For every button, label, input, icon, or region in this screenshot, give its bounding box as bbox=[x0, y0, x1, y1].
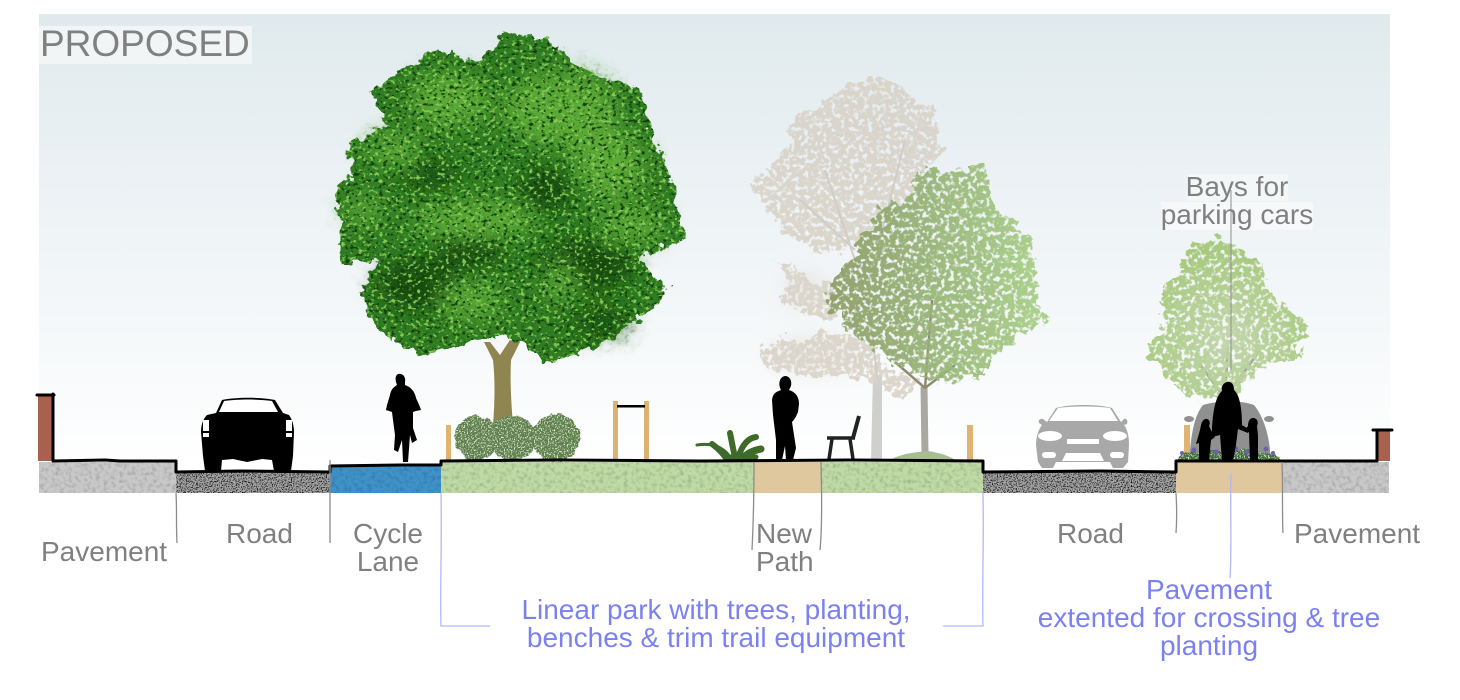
label: road right: Road bbox=[1057, 518, 1124, 549]
trunk bbox=[484, 340, 520, 425]
label: pavement right: Pavement bbox=[1294, 518, 1420, 549]
heading: proposed: PROPOSED bbox=[40, 23, 250, 64]
pickup truck, rear view bbox=[201, 398, 294, 471]
flower planting bbox=[1177, 446, 1281, 461]
label: bays for parking cars bbox=[1161, 171, 1313, 370]
large mature tree bbox=[332, 35, 686, 425]
right young tree bbox=[1146, 238, 1308, 398]
timber posts bbox=[446, 425, 1190, 461]
label: pavement left: Pavement bbox=[41, 536, 167, 567]
label: bays for parking cars: parking cars bbox=[1161, 199, 1313, 230]
new path slab bbox=[754, 462, 821, 493]
family silhouettes bbox=[1196, 382, 1258, 460]
cyclist bbox=[386, 374, 421, 462]
ground layers bbox=[39, 462, 1389, 493]
right brick wall bbox=[1377, 431, 1390, 461]
label: cycle lane: Lane bbox=[357, 546, 419, 577]
walls bbox=[38, 395, 1390, 461]
label: new path: New bbox=[756, 518, 813, 549]
bench bbox=[827, 416, 859, 459]
leader: extended pavement bbox=[1230, 473, 1231, 578]
left pavement slab bbox=[39, 462, 176, 493]
person standing bbox=[772, 376, 799, 460]
fern bbox=[697, 433, 761, 459]
low planting under middle tree bbox=[890, 451, 955, 460]
cycle lane slab bbox=[330, 466, 441, 493]
left road slab bbox=[176, 472, 330, 493]
canopy bbox=[332, 35, 686, 362]
bracket: linear park bbox=[441, 493, 983, 626]
label: road left: Road bbox=[226, 518, 293, 549]
label: cycle lane: Cycle bbox=[353, 518, 423, 549]
middle young tree bbox=[825, 168, 1045, 455]
trim trail equipment bbox=[613, 401, 649, 460]
callout: extended pavement: extented for crossing & tree bbox=[1038, 602, 1380, 633]
callout: extended pavement: planting bbox=[1160, 630, 1258, 661]
label: new path: Path bbox=[756, 546, 814, 577]
shrubs bbox=[454, 414, 580, 462]
sky background bbox=[39, 14, 1390, 464]
label: bays for parking cars: Bays for bbox=[1186, 171, 1288, 202]
left brick wall bbox=[38, 395, 53, 461]
leader lines grey bbox=[176, 460, 1283, 550]
callout: linear park: Linear park with trees, planting, bbox=[521, 594, 911, 625]
grey car on road bbox=[1036, 405, 1129, 468]
extended pavement slab bbox=[1176, 462, 1282, 493]
parked grey car bbox=[1184, 401, 1274, 460]
right pavement slab bbox=[1282, 462, 1389, 493]
callout: extended pavement: Pavement bbox=[1146, 574, 1272, 605]
ground section line bbox=[37, 394, 1392, 472]
callout: linear park: benches & trim trail equipment bbox=[527, 622, 905, 653]
right road slab bbox=[983, 472, 1176, 493]
linear park grass bbox=[441, 462, 983, 493]
faded existing tree bbox=[750, 78, 943, 460]
